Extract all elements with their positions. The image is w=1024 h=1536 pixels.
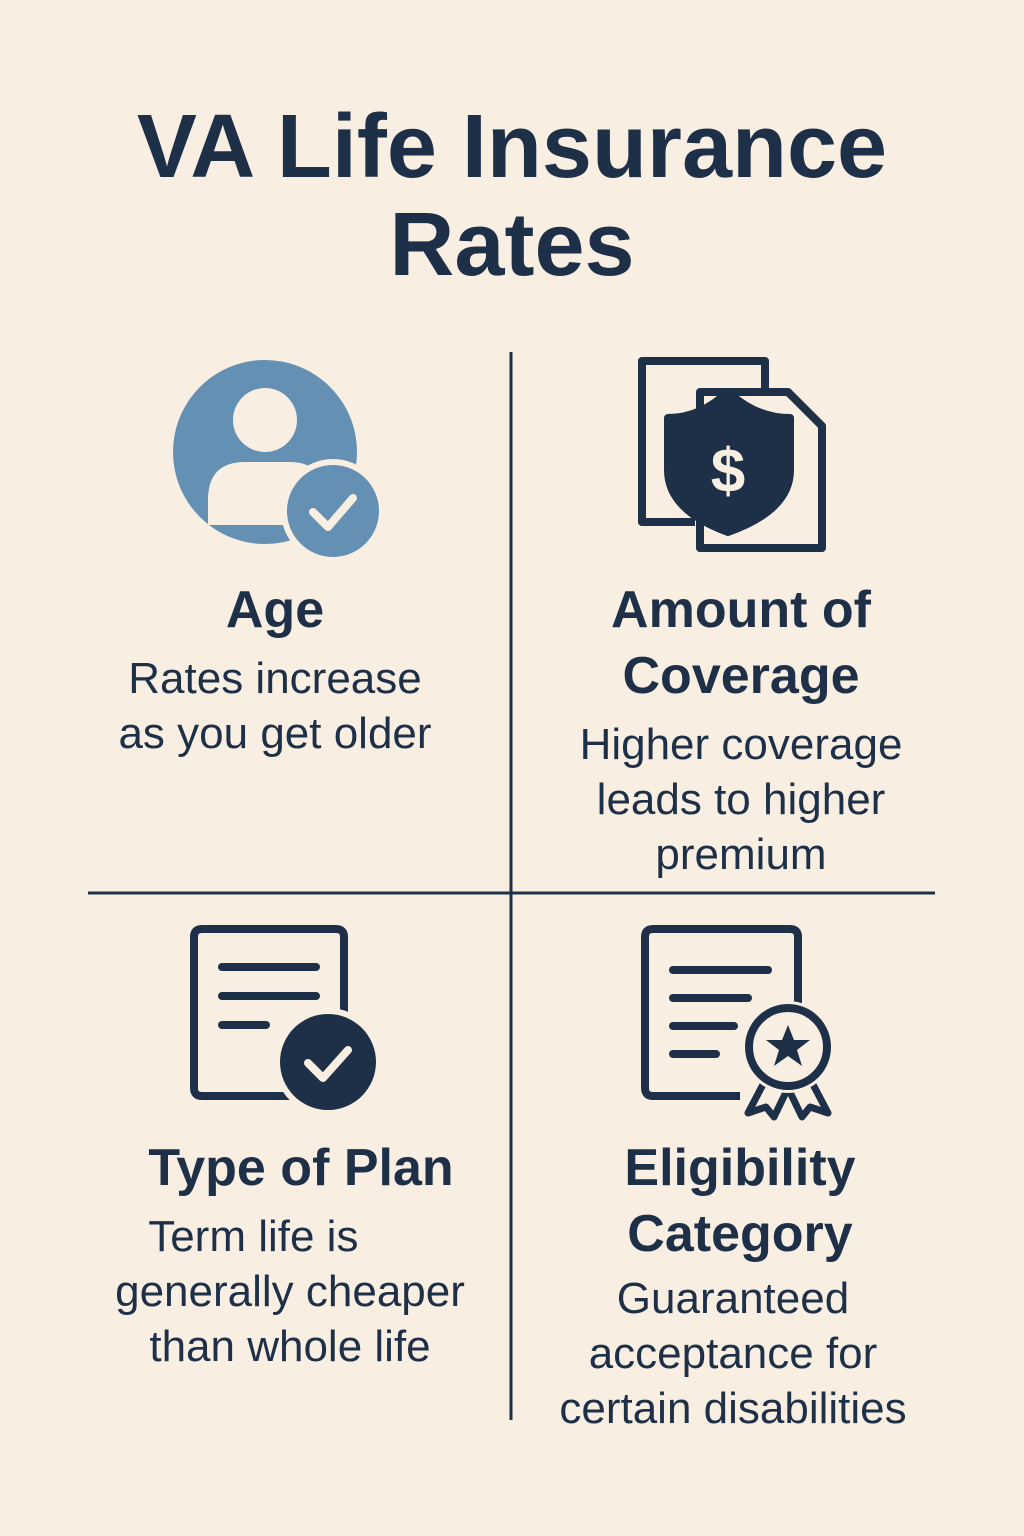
text: age: Rates increase xyxy=(128,654,422,703)
heading: coverage xyxy=(611,581,872,705)
icon: person with check xyxy=(173,360,385,563)
text: coverage: leads to higher xyxy=(597,775,885,824)
text: coverage: premium xyxy=(655,830,827,879)
icon: certificate xyxy=(645,929,834,1117)
panel: eligibility category xyxy=(559,1139,907,1433)
text: eligibility: certain disabilities xyxy=(559,1384,907,1433)
text: eligibility xyxy=(559,1274,907,1433)
panel: amount of coverage xyxy=(580,581,902,879)
title: VA Life Insurance xyxy=(137,97,887,197)
heading: coverage: Amount of xyxy=(611,581,871,639)
text: age xyxy=(118,654,432,758)
text: eligibility: Guaranteed xyxy=(617,1274,849,1323)
icon: shield documents: $ xyxy=(711,437,745,506)
text: type of plan: generally cheaper xyxy=(115,1267,465,1316)
heading: type of plan: Type of Plan xyxy=(148,1139,454,1197)
panel: type of plan xyxy=(115,1139,465,1371)
heading: age: Age xyxy=(226,581,324,639)
icon: document with check xyxy=(194,929,382,1116)
heading: eligibility xyxy=(624,1139,856,1263)
text: type of plan: Term life is xyxy=(148,1212,358,1261)
heading: coverage: Coverage xyxy=(622,647,860,705)
title: Rates xyxy=(389,195,635,295)
text: eligibility: acceptance for xyxy=(589,1329,877,1378)
text: coverage xyxy=(580,720,902,879)
text: type of plan xyxy=(115,1212,465,1371)
panel: age xyxy=(118,581,432,758)
text: coverage: Higher coverage xyxy=(580,720,902,769)
title xyxy=(137,97,887,295)
heading: eligibility: Category xyxy=(627,1205,853,1263)
heading: eligibility: Eligibility xyxy=(624,1139,856,1197)
text: age: as you get older xyxy=(118,709,432,758)
text: type of plan: than whole life xyxy=(149,1322,431,1371)
icon: shield documents xyxy=(642,361,822,548)
